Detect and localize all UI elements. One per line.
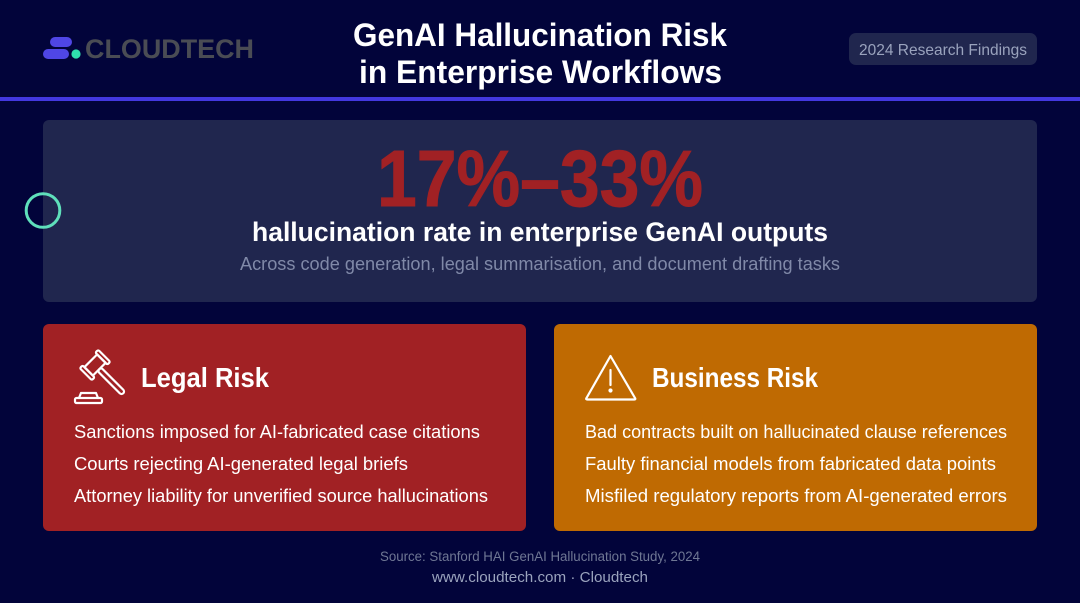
business risk list: Misfiled regulatory reports from AI-generated errors xyxy=(585,485,1007,506)
heading: legal risk: Legal Risk xyxy=(141,362,269,393)
heading: business risk: Business Risk xyxy=(652,362,818,393)
decorative ring icon xyxy=(26,194,60,227)
stat subtext: Across code generation, legal summarisation, and document drafting tasks xyxy=(240,254,840,274)
title: GenAI Hallucination Risk xyxy=(353,17,727,53)
business risk list: Bad contracts built on hallucinated clause references xyxy=(585,421,1007,442)
header divider xyxy=(0,97,1080,101)
panel: business risk xyxy=(554,324,1037,531)
legal risk list: Sanctions imposed for AI-fabricated case citations xyxy=(74,421,480,442)
logo: Cloudtech: CLOUDTECH xyxy=(85,34,254,64)
business risk list: Faulty financial models from fabricated data points xyxy=(585,453,996,474)
source note: Source: Stanford HAI GenAI Hallucination Study, 2024 xyxy=(380,549,700,564)
business risk list xyxy=(585,421,1007,506)
legal risk list: Courts rejecting AI-generated legal briefs xyxy=(74,453,408,474)
icon: warning triangle xyxy=(586,356,635,400)
panel: legal risk xyxy=(43,324,526,531)
big number: 17%–33% xyxy=(377,134,703,223)
legal risk list: Attorney liability for unverified source hallucinations xyxy=(74,485,488,506)
legal risk list xyxy=(74,421,488,506)
panel: headline statistic xyxy=(43,120,1037,302)
title xyxy=(353,17,727,90)
icon: gavel xyxy=(75,350,132,403)
stat caption: hallucination rate in enterprise GenAI outputs xyxy=(252,217,828,247)
badge: 2024 Research Findings xyxy=(849,33,1037,65)
badge: 2024 Research Findings: 2024 Research Findings xyxy=(859,42,1027,59)
footer url: www.cloudtech.com · Cloudtech xyxy=(431,569,648,586)
title: in Enterprise Workflows xyxy=(359,54,722,90)
